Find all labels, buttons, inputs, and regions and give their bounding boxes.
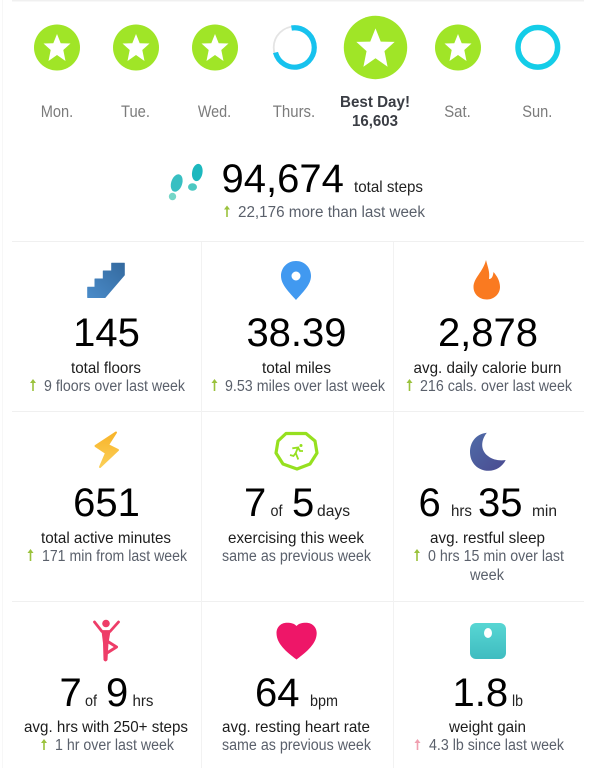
panel: exercise days: exercising this week	[228, 530, 365, 547]
panel: exercise days: 7	[244, 481, 266, 525]
Sunday	[518, 28, 558, 121]
panel: active minutes: 171 min from last week	[42, 548, 187, 565]
panel: active minutes: total active minutes	[41, 530, 171, 547]
panel: total steps: 94,674	[222, 157, 344, 201]
Saturday	[435, 24, 481, 121]
panel: exercise days: days	[317, 503, 350, 520]
panel: hourly steps: hrs	[132, 693, 154, 710]
icon: up arrow	[406, 379, 412, 391]
panel: floors	[30, 263, 185, 395]
Tuesday: Tue.	[121, 102, 150, 121]
panel: total steps: total steps	[354, 179, 423, 196]
panel: exercise days: 5	[292, 481, 314, 525]
panel: heart rate: 64	[255, 671, 300, 715]
panel: miles: total miles	[262, 360, 331, 377]
panel: floors: 145	[73, 311, 140, 355]
panel: calories	[406, 260, 572, 395]
icon: up arrow	[414, 739, 420, 750]
icon: scale	[470, 623, 506, 659]
icon: up arrow	[212, 379, 218, 391]
best day: 16,603	[352, 113, 398, 130]
panel: miles: 38.39	[246, 311, 347, 355]
panel: weight: 1.8	[452, 671, 508, 715]
panel: sleep: avg. restful sleep	[430, 530, 545, 547]
panel: calories: avg. daily calorie burn	[414, 360, 562, 377]
Thursday: Thurs.	[273, 102, 315, 121]
panel: heart rate: same as previous week	[222, 737, 371, 754]
panel: weight	[414, 623, 564, 754]
panel: hourly steps: of	[85, 693, 97, 710]
panel: sleep: 35	[478, 481, 522, 525]
panel: active minutes	[28, 432, 187, 565]
panel: calories: 216 cals. over last week	[420, 378, 572, 395]
panel: total steps	[169, 157, 425, 221]
panel: sleep: 6	[418, 481, 441, 525]
icon: heart	[276, 623, 317, 660]
icon: footprints	[169, 163, 204, 200]
icon: up arrow	[224, 206, 230, 217]
icon: up arrow	[414, 549, 420, 561]
panel: heart rate: avg. resting heart rate	[222, 719, 370, 736]
panel: hourly steps	[24, 620, 188, 754]
best day: Best Day!	[340, 94, 410, 111]
Saturday: Sat.	[444, 102, 471, 121]
icon: map pin	[281, 261, 311, 300]
panel: week days	[34, 16, 558, 130]
icon: yoga figure	[94, 620, 118, 662]
panel: sleep: week	[469, 567, 504, 584]
panel: miles: 9.53 miles over last week	[225, 378, 385, 395]
panel: heart rate	[222, 623, 371, 754]
panel: sleep	[414, 433, 565, 584]
panel: miles	[212, 261, 385, 395]
panel: total steps: 22,176 more than last week	[238, 204, 425, 221]
panel: calories: 2,878	[438, 311, 538, 355]
icon: exercise badge	[276, 434, 317, 469]
panel: sleep: hrs	[451, 503, 472, 520]
panel: hourly steps: 7	[60, 671, 82, 715]
panel: exercise days: of	[270, 503, 283, 520]
Thursday	[273, 26, 316, 121]
best day	[340, 16, 410, 130]
panel: active minutes: 651	[73, 481, 140, 525]
panel: floors: 9 floors over last week	[44, 378, 185, 395]
Sunday: Sun.	[522, 102, 552, 121]
panel: heart rate: bpm	[310, 693, 338, 710]
Tuesday	[113, 24, 159, 121]
panel: weight: weight gain	[448, 719, 526, 736]
Wednesday: Wed.	[198, 102, 231, 121]
icon: stairs	[88, 263, 124, 298]
icon: lightning bolt	[96, 432, 118, 467]
panel: exercise days	[222, 434, 371, 565]
panel: sleep: min	[532, 503, 557, 520]
panel: weight: 4.3 lb since last week	[429, 737, 564, 754]
icon: up arrow	[28, 549, 34, 561]
Wednesday	[192, 24, 238, 121]
panel: hourly steps: 9	[106, 671, 128, 715]
icon: up arrow	[41, 739, 47, 750]
Monday	[34, 24, 80, 121]
icon: up arrow	[30, 379, 36, 391]
panel: weight: lb	[512, 693, 523, 710]
panel: hourly steps: avg. hrs with 250+ steps	[24, 719, 188, 736]
panel: hourly steps: 1 hr over last week	[55, 737, 174, 754]
Monday: Mon.	[41, 102, 73, 121]
icon: crescent moon	[470, 433, 506, 471]
icon: flame	[474, 260, 500, 300]
panel: sleep: 0 hrs 15 min over last	[428, 548, 565, 565]
panel: exercise days: same as previous week	[222, 548, 371, 565]
panel: floors: total floors	[71, 360, 141, 377]
